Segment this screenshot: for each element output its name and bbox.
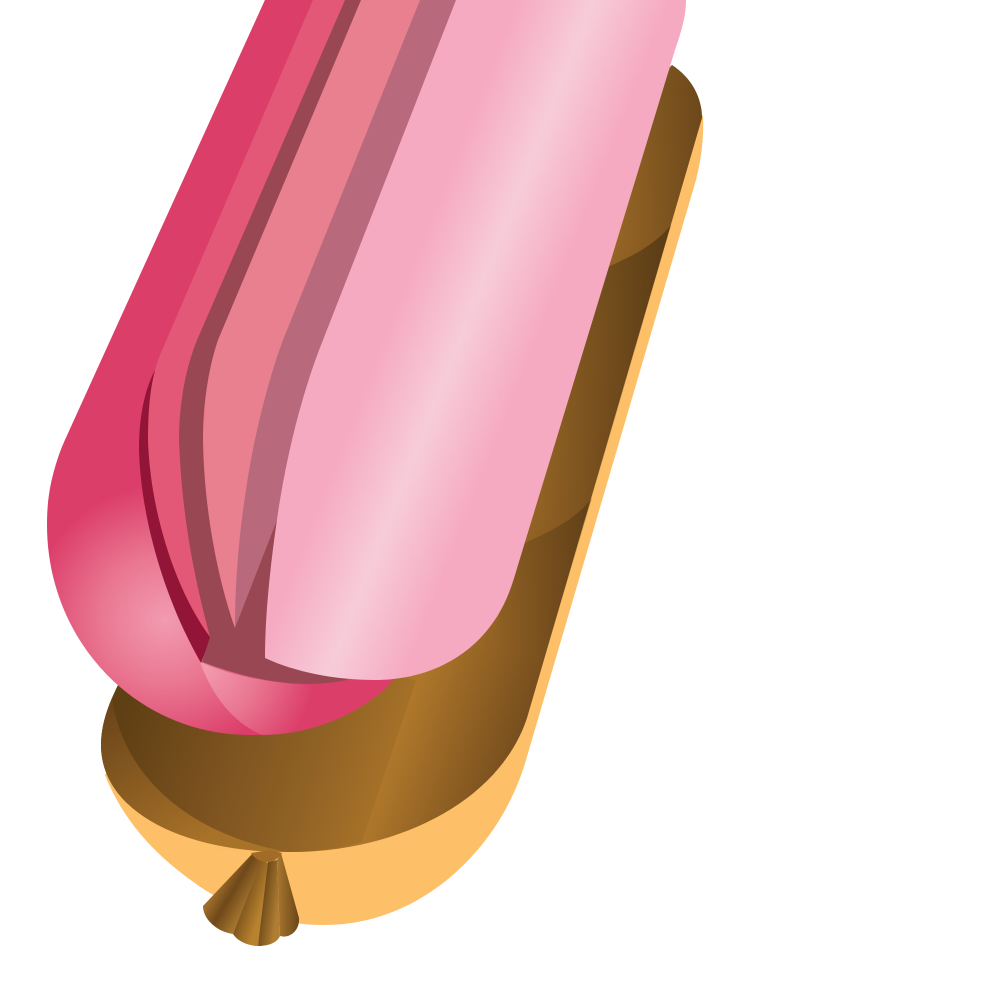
middle section shade: [520, 225, 671, 545]
top cap shade: [600, 65, 702, 270]
mauve band: [235, 0, 456, 628]
fold 4: [277, 853, 299, 937]
pink icing: [47, 0, 686, 735]
ridge shade: [200, 650, 416, 852]
crescent dark: [139, 370, 212, 663]
collar: [251, 850, 282, 862]
fold 1: [203, 853, 265, 934]
icing base: [47, 0, 560, 735]
maroon band: [179, 0, 380, 684]
salmon band: [203, 0, 425, 628]
icing lobe right: [200, 662, 392, 735]
lower section shade: [480, 498, 592, 718]
nozzle tip: [203, 850, 299, 946]
pink band: [148, 0, 360, 637]
lower crescent: [101, 698, 287, 852]
icing upper shade: [51, 0, 320, 487]
light glaze: [265, 0, 686, 680]
pastry base: [105, 115, 703, 925]
fold 2: [233, 860, 270, 946]
fold 3: [258, 860, 280, 946]
chocolate layer: [101, 65, 702, 852]
chocolate body: [101, 65, 702, 852]
